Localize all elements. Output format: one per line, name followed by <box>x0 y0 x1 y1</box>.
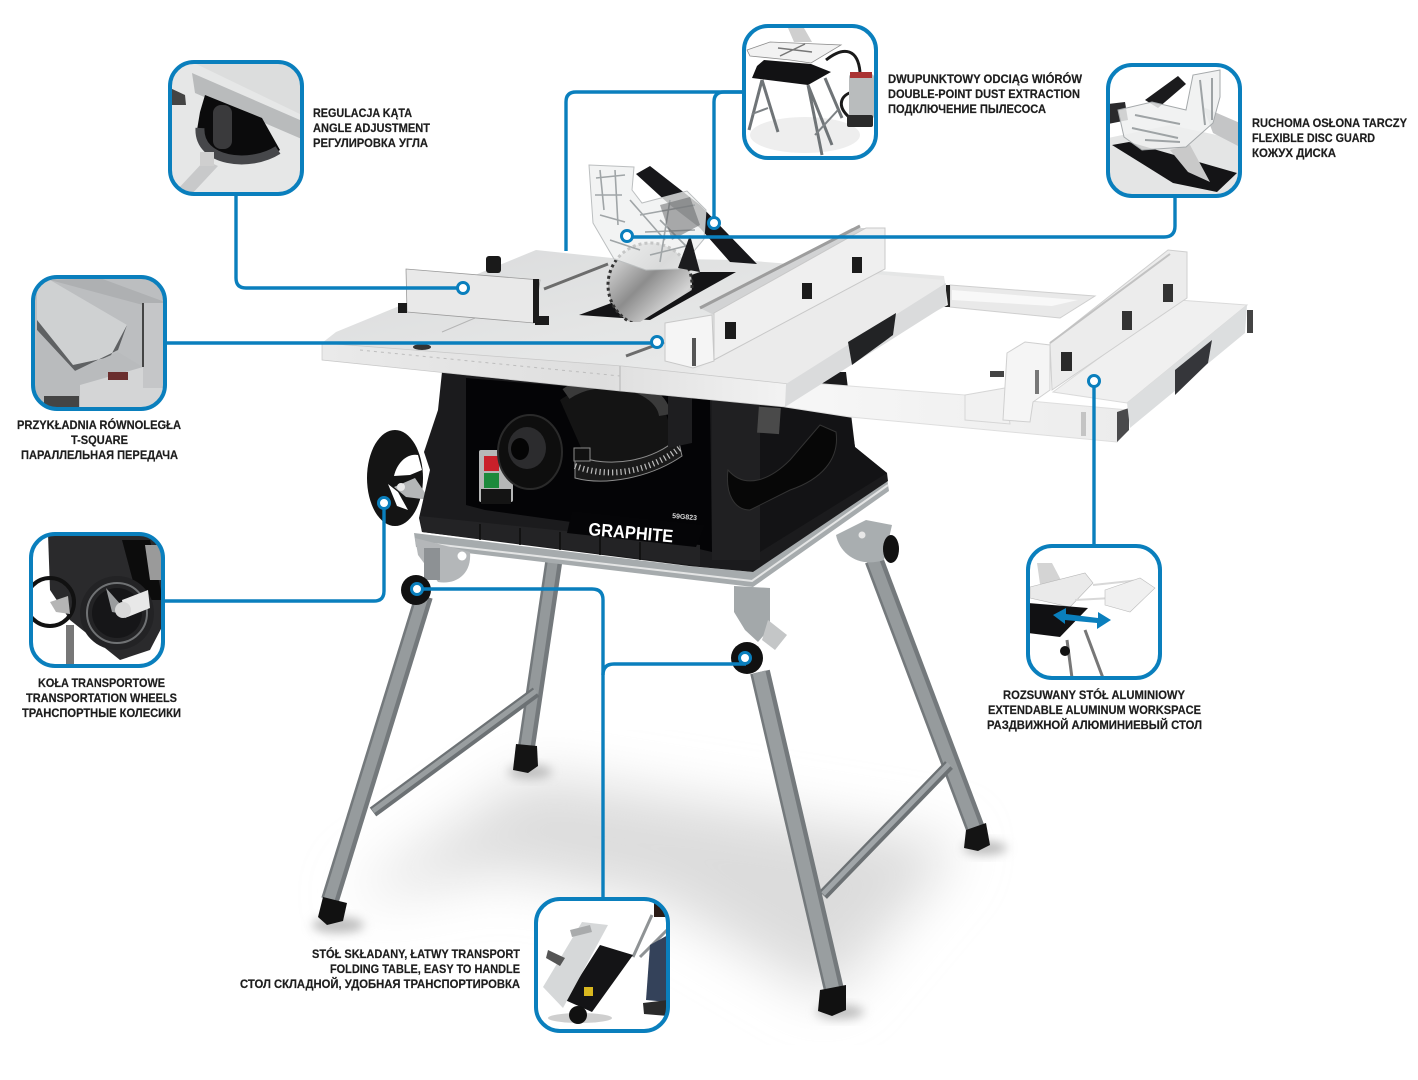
panel: angle adjustment <box>170 62 304 196</box>
text: angle adjustment <box>313 106 431 150</box>
icon: double arrow <box>1053 608 1111 629</box>
steel frame <box>414 478 889 587</box>
text: folding table: СТОЛ СКЛАДНОЙ, УДОБНАЯ ТРАНСПОРТИРОВКА <box>240 976 520 991</box>
table saw on folding stand <box>318 165 1253 1016</box>
table handle <box>848 313 896 365</box>
extended table <box>1053 300 1247 403</box>
bevel scale <box>560 382 692 481</box>
text: extendable workspace <box>987 687 1202 732</box>
text: blade guard: RUCHOMA OSŁONA TARCZY <box>1252 116 1407 130</box>
text: t-square: T-SQUARE <box>71 433 128 447</box>
text: transport wheels: TRANSPORTATION WHEELS <box>26 691 177 705</box>
text: extendable workspace: EXTENDABLE ALUMINUM WORKSPACE <box>988 703 1201 717</box>
connector lines <box>163 92 1175 899</box>
connector dots <box>378 218 1100 664</box>
leg brackets <box>415 520 899 650</box>
clear blade guard <box>589 165 706 272</box>
side crank <box>727 425 837 510</box>
text: extendable workspace: ROZSUWANY STÓŁ ALUMINIOWY <box>1003 687 1185 702</box>
cross bars <box>373 691 949 895</box>
text: folding table <box>240 946 521 991</box>
knobs <box>401 575 763 674</box>
handwheel <box>498 415 562 489</box>
text: transport wheels: ТРАНСПОРТНЫЕ КОЛЕСИКИ <box>22 706 181 720</box>
table surface <box>322 250 948 390</box>
brand text: GRAPHITE <box>588 519 674 546</box>
label plate <box>757 407 781 434</box>
text: dust extraction: ПОДКЛЮЧЕНИЕ ПЫЛЕСОСА <box>888 102 1046 116</box>
text: extendable workspace: РАЗДВИЖНОЙ АЛЮМИНИЕВЫЙ СТОЛ <box>987 717 1202 732</box>
extended rails <box>944 285 1095 318</box>
floor shadow <box>312 765 1007 1019</box>
text: angle adjustment: REGULACJA KĄTA <box>313 106 412 120</box>
text: blade guard: КОЖУХ ДИСКА <box>1252 146 1336 160</box>
text: folding table: STÓŁ SKŁADANY, ŁATWY TRANSPORT <box>312 946 521 961</box>
text: blade guard <box>1252 116 1407 160</box>
text: dust extraction <box>888 71 1083 116</box>
text: blade guard: FLEXIBLE DISC GUARD <box>1252 131 1375 145</box>
panel: transport wheels <box>26 534 163 666</box>
front legs <box>329 596 834 990</box>
panel: dust extraction <box>744 26 876 158</box>
text: angle adjustment: РЕГУЛИРОВКА УГЛА <box>313 136 428 150</box>
back legs <box>525 560 976 830</box>
mitre slots <box>544 264 664 356</box>
table right wing <box>690 274 944 388</box>
text: dust extraction: DOUBLE-POINT DUST EXTRACTION <box>888 87 1080 101</box>
text: t-square: PRZYKŁADNIA RÓWNOLEGŁA <box>17 417 181 432</box>
panel: folding table <box>536 899 668 1031</box>
model text: 59G823 <box>672 513 697 522</box>
text: angle adjustment: ANGLE ADJUSTMENT <box>313 121 431 135</box>
text: t-square <box>17 417 181 462</box>
text: transport wheels: KOŁA TRANSPORTOWE <box>38 676 165 690</box>
text: t-square: ПАРАЛЛЕЛЬНАЯ ПЕРЕДАЧА <box>21 448 178 462</box>
black saw housing <box>419 372 888 572</box>
text: dust extraction: DWUPUNKTOWY ODCIĄG WIÓRÓW <box>888 71 1083 86</box>
panel: blade guard <box>1108 65 1240 196</box>
rubber feet back <box>513 744 990 851</box>
mitre gauge fence <box>398 256 549 325</box>
extended handle <box>1175 340 1212 395</box>
panel: extendable workspace <box>1028 546 1160 678</box>
rip fence <box>665 226 885 368</box>
text: folding table: FOLDING TABLE, EASY TO HANDLE <box>330 962 520 976</box>
saw blade <box>608 243 692 327</box>
brand plate <box>567 511 705 547</box>
transport wheel <box>367 430 430 526</box>
rubber feet front <box>318 897 846 1016</box>
extended front beam <box>785 381 1128 442</box>
table front edge <box>322 343 790 407</box>
extended fence <box>1003 250 1187 422</box>
riving arm and dust hose <box>636 166 757 264</box>
text: transport wheels <box>22 676 181 720</box>
panel: t-square <box>33 277 165 409</box>
blade insert plate <box>579 272 736 320</box>
switch <box>479 450 513 504</box>
